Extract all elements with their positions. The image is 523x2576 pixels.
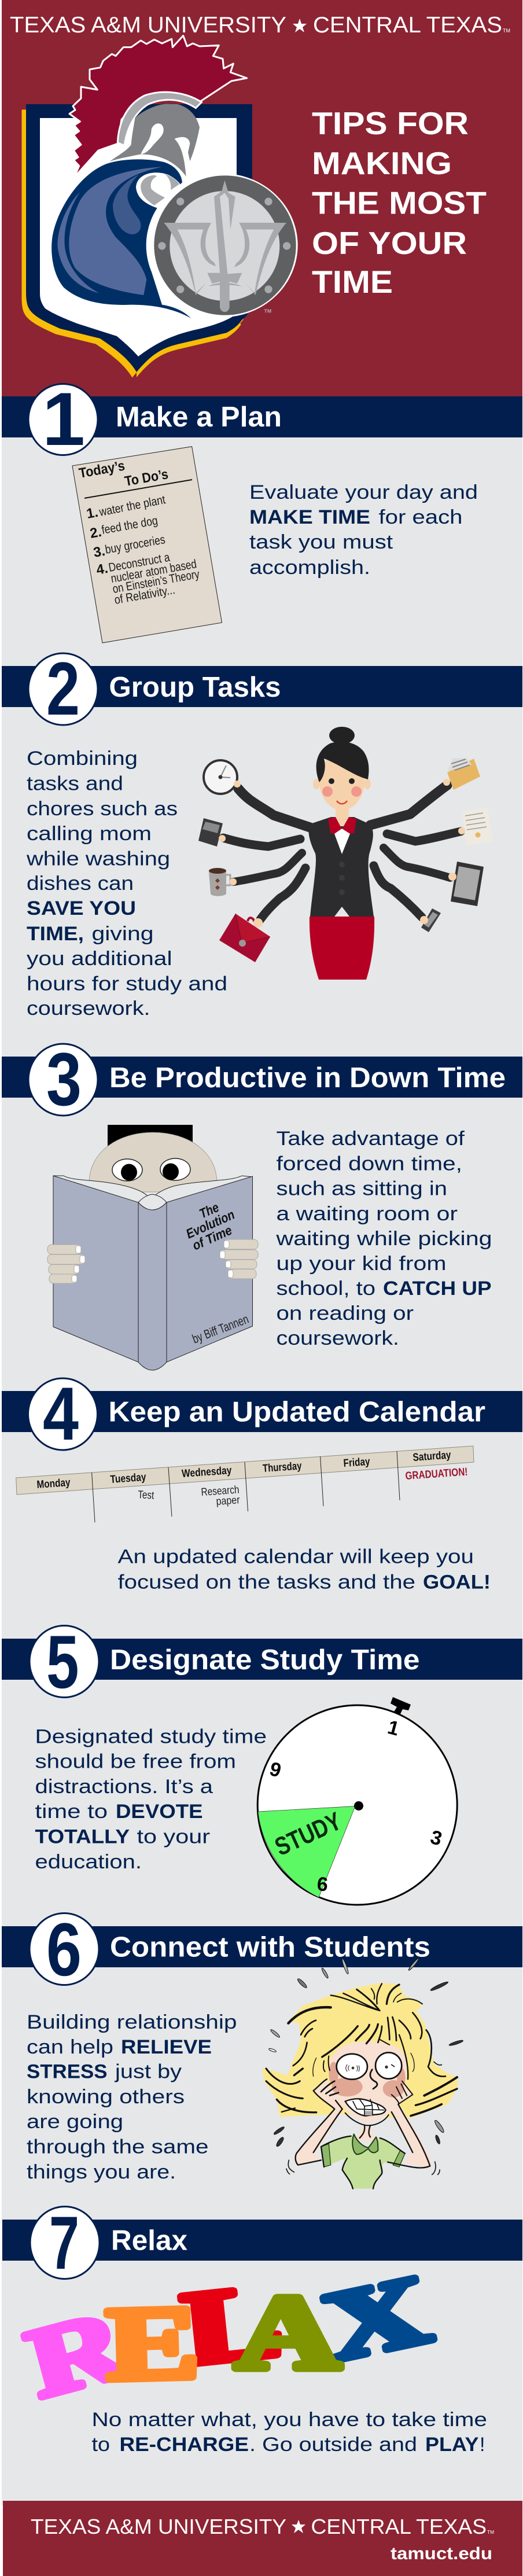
footer wordmark: TEXAS A&M UNIVERSITY [31,2515,286,2538]
heading bar 1: 1 [42,377,85,461]
clock: 1 [385,1716,402,1740]
graphic: RELAX letters: L [177,2262,288,2387]
section 6: connect with students [2,1907,522,2189]
text: relieve stress: through the same [27,2136,208,2158]
text: re-charge: No matter what, you have to take time [91,2409,487,2431]
university wordmark [10,13,510,38]
heading bar 3: Be Productive in Down Time [109,1062,506,1094]
helmet openings [141,123,164,154]
sweat drops [268,1958,463,2147]
text: save you time: SAVE YOU [27,897,136,919]
text: relieve stress: RELIEVE [121,2036,212,2058]
heading bar 4: 4 [43,1371,79,1456]
text: catch up: a waiting room or [277,1203,458,1225]
heading bar 6: 6 [46,1907,82,1992]
heading bar 3 [2,1037,522,1121]
nose [370,2070,377,2089]
to-do note: water the plant [98,493,167,519]
text: devote totally: to your [137,1826,210,1848]
website: tamuct.edu [391,2544,492,2563]
logo: warrior shield: TM [264,308,271,314]
text: save you time: Combining [27,748,138,770]
text: catch up: coursework. [277,1327,399,1349]
illustration: multitasking woman [198,727,492,980]
heading bar 5: 5 [46,1620,79,1704]
text: make time: for each [378,506,463,528]
to-do note: To Do’s [123,466,170,490]
text: catch up [275,1128,492,1349]
graphic: RELAX letters: R [17,2289,138,2419]
to-do note: 1. [85,505,100,522]
main title: THE MOST [312,185,487,221]
calendar strip: paper [216,1494,241,1508]
heading bar 1: Make a Plan [116,402,282,433]
crest [69,36,247,178]
book title: of Time [190,1222,234,1253]
clock [204,760,237,794]
helmet band [117,92,201,146]
calendar strip: Wednesday [181,1464,232,1480]
university wordmark: CENTRAL TEXAS [313,13,502,38]
text: catch up: CATCH UP [383,1278,492,1300]
main title [312,105,487,300]
text: relieve stress: STRESS [27,2061,108,2083]
section 4: keep an updated calendar [2,1371,522,1594]
section 5: designate study time [2,1620,522,1905]
text: catch up: up your kid from [277,1253,447,1275]
text: devote totally: time to [35,1801,108,1823]
text: goal [118,1546,491,1594]
heading bar 7: 7 [49,2200,79,2285]
heading bar 5 [2,1620,522,1704]
text: devote totally: distractions. It’s a [35,1776,213,1798]
clock: 9 [267,1758,283,1782]
cape [51,159,191,318]
calendar strip: Test [138,1489,154,1502]
book cover [53,1176,252,1370]
calendar strip: Thursday [262,1460,303,1475]
section 1: make a plan [2,377,522,643]
to-do note [72,447,222,643]
arm outlines [296,2079,430,2189]
mug [209,868,230,896]
heading bar 4 [2,1371,522,1456]
text: relieve stress: knowing others [27,2086,185,2108]
section 2: group tasks [2,646,522,1020]
face [329,2041,407,2122]
text: catch up: on reading or [277,1302,414,1324]
tablet [451,862,484,906]
mouth [345,2099,386,2116]
shirt [321,2136,405,2189]
to-do note: 3. [92,543,106,561]
text: goal: focused on the tasks and the [118,1572,415,1594]
main title: TIPS FOR [312,105,469,141]
to-do note: Deconstruct a [108,551,171,575]
neck and head [336,805,349,826]
document [462,808,492,846]
text: devote totally: education. [35,1851,142,1873]
skirt [310,917,374,980]
illustration: reader with book [47,1125,258,1370]
clock: STUDY [271,1807,345,1861]
text: make time: task you must [249,531,393,553]
calendar strip: GRADUATION! [405,1466,468,1482]
shake marks [286,2160,440,2174]
text: save you time: while washing [26,848,170,870]
section 7: relax [2,2200,522,2456]
text: devote totally: Designated study time [35,1725,267,1747]
to-do note: of Relativity... [113,583,176,607]
right hand [219,1239,258,1279]
main title: MAKING [312,145,452,181]
text: save you time: coursework. [27,998,150,1020]
hands [219,779,465,928]
university wordmark: TEXAS A&M UNIVERSITY [10,13,286,38]
text: save you time: chores such as [27,798,178,820]
heading bar 6: Connect with Students [110,1931,430,1963]
text: re-charge: PLAY [425,2434,479,2456]
footer wordmark: CENTRAL TEXAS [311,2515,487,2538]
text: re-charge: to [91,2434,110,2456]
calendar strip: Friday [343,1456,371,1470]
text: devote totally [35,1725,267,1873]
jacket [308,817,374,917]
heading bar 1 [2,377,522,461]
clock [257,1697,457,1905]
graphic: RELAX letters: X [314,2254,439,2383]
text: catch up: school, to [277,1278,375,1300]
text: re-charge [91,2409,487,2456]
clock: 6 [316,1873,329,1896]
text: make time: MAKE TIME [249,506,370,528]
to-do note: feed the dog [101,514,159,537]
heading bar 6 [2,1907,522,1992]
text: re-charge: RE-CHARGE [119,2434,249,2456]
text: catch up: Take advantage of [277,1128,465,1150]
heading bar 7 [2,2200,522,2285]
text: relieve stress: are going [27,2111,123,2133]
hair [262,1983,458,2119]
to-do note: 2. [89,524,103,542]
text: catch up: waiting while picking [275,1228,492,1250]
book title: Evolution [183,1207,237,1242]
text: save you time: calling mom [27,823,152,845]
phone [421,908,441,932]
text: devote totally: should be free from [35,1751,236,1773]
footer [3,2501,522,2576]
calendar strip: Research [201,1484,240,1499]
text: relieve stress: Building relationship [27,2011,237,2033]
held items [198,758,492,962]
heading bar 2 [2,646,522,731]
briefcase [219,914,270,962]
text: make time [249,481,478,579]
footer wordmark [31,2515,494,2538]
main title: OF YOUR [312,225,467,261]
main title: TIME [312,264,393,300]
trident [164,181,286,312]
to-do note: on Einstein’s Theory [112,568,201,596]
to-do note: Today’s [78,458,126,481]
heading bar 7: Relax [111,2225,187,2257]
heading bar 2: 2 [46,646,80,731]
heading bar 5: Designate Study Time [110,1644,420,1676]
heading bar 3: 3 [46,1037,82,1121]
left hand [47,1245,86,1283]
graphic: RELAX letters: E [105,2284,201,2402]
logo: warrior shield [22,36,298,378]
clock: 3 [428,1826,444,1850]
text: relieve stress: just by [115,2061,182,2083]
text: save you time: giving [91,923,154,945]
round shield [146,174,298,317]
text: re-charge: . Go outside and [249,2434,417,2456]
text: relieve stress: things you are. [27,2161,176,2183]
envelope [447,758,480,790]
text: devote totally: DEVOTE [116,1801,202,1823]
neck [355,2125,375,2142]
calendar strip: Saturday [412,1449,452,1464]
text: devote totally: TOTALLY [35,1826,130,1848]
to-do note: buy groceries [104,533,166,557]
knob [391,1697,411,1716]
heading bar 2: Group Tasks [109,672,281,703]
footer wordmark: TM [487,2530,494,2535]
text: save you time: tasks and [27,773,123,795]
book title [183,1199,237,1253]
text: save you time: hours for study and [27,973,227,995]
graphic: RELAX letters: A [235,2273,341,2391]
text: save you time: TIME, [27,923,84,945]
hair strands [266,1983,457,2116]
calendar strip [16,1446,474,1522]
header banner [2,0,522,397]
text: catch up: such as sitting in [277,1178,447,1200]
arms [296,2079,343,2165]
illustration: stressed student [262,1958,463,2189]
text: goal: An updated calendar will keep you [118,1546,474,1568]
text: make time: accomplish. [249,557,370,579]
book pages [53,1176,252,1209]
arms [223,785,461,919]
calculator [198,818,223,847]
text: relieve stress: can help [27,2036,113,2058]
to-do note: nuclear atom based [110,557,198,586]
text: save you time [26,748,227,1020]
graphic: RELAX letters [17,2254,439,2419]
university wordmark: TM [503,28,510,34]
study sector [258,1806,355,1897]
book title: The [197,1199,221,1221]
illustration: reader with book: by Biff Tannen [190,1312,251,1346]
text: save you time: dishes can [27,873,134,895]
text: catch up: forced down time, [277,1153,462,1175]
text: make time: Evaluate your day and [249,481,478,503]
text: relieve stress [27,2011,237,2183]
calendar strip: Monday [36,1477,71,1491]
eyes [337,2054,367,2080]
text: goal: GOAL! [423,1572,491,1594]
to-do note: 4. [95,561,109,578]
section 3: be productive in down time [2,1037,522,1370]
text: save you time: you additional [27,948,172,970]
calendar strip: Tuesday [110,1471,147,1486]
heading bar 4: Keep an Updated Calendar [109,1397,485,1428]
text: re-charge: ! [480,2434,485,2456]
